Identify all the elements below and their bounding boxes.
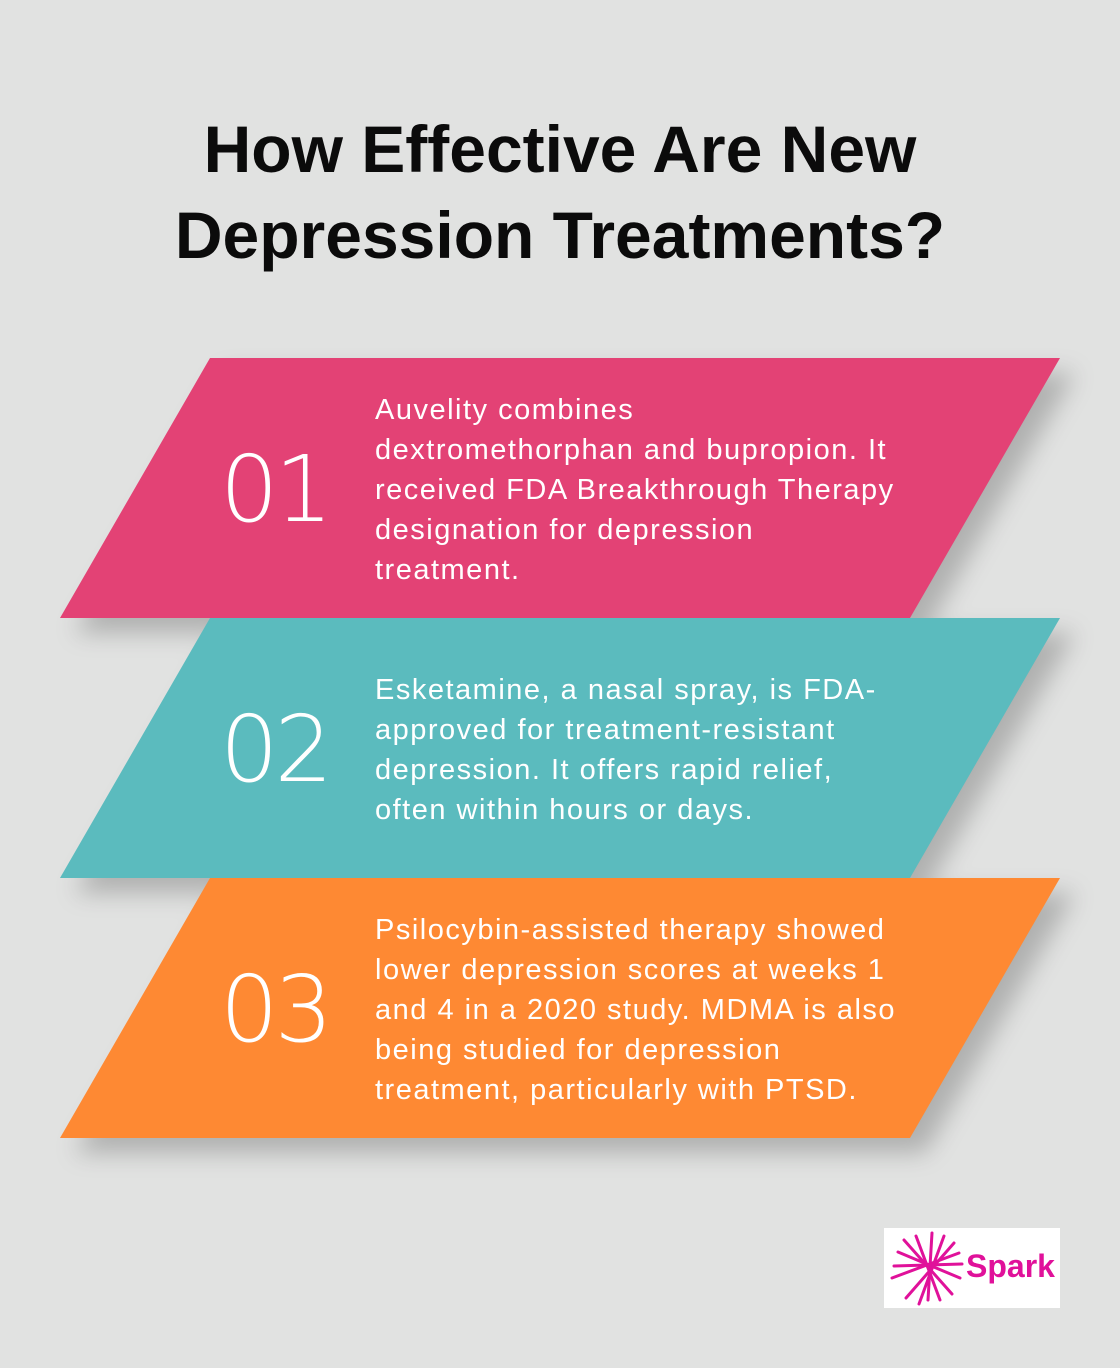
logo (884, 1228, 1060, 1308)
text 01: designation for depression (375, 514, 754, 546)
text 03 (375, 914, 896, 1106)
text 03: Psilocybin-assisted therapy showed (375, 914, 885, 946)
text 03: being studied for depression (375, 1034, 781, 1066)
text 03: treatment, particularly with PTSD. (375, 1074, 858, 1106)
text 03: lower depression scores at weeks 1 (375, 954, 885, 986)
text 02: Esketamine, a nasal spray, is FDA- (375, 674, 877, 706)
text 01: Auvelity combines (375, 394, 634, 426)
text 03: and 4 in a 2020 study. MDMA is also (375, 994, 896, 1026)
number 03: 03 (220, 956, 329, 1063)
number 02: 02 (220, 696, 329, 803)
logo text: Spark (966, 1248, 1055, 1284)
icon: spark burst (890, 1232, 964, 1306)
panel: 01 (60, 358, 1060, 618)
panel: 03 (60, 878, 1060, 1138)
title (175, 112, 945, 272)
title: How Effective Are New (204, 112, 916, 186)
title: Depression Treatments? (175, 198, 945, 272)
text 02: depression. It offers rapid relief, (375, 754, 833, 786)
text 02 (375, 674, 877, 826)
text 02: approved for treatment-resistant (375, 714, 836, 746)
text 01: treatment. (375, 554, 521, 586)
text 01: dextromethorphan and bupropion. It (375, 434, 887, 466)
text 01 (375, 394, 895, 586)
panel: 02 (60, 618, 1060, 878)
text 01: received FDA Breakthrough Therapy (375, 474, 895, 506)
number 01: 01 (220, 436, 329, 543)
text 02: often within hours or days. (375, 794, 754, 826)
